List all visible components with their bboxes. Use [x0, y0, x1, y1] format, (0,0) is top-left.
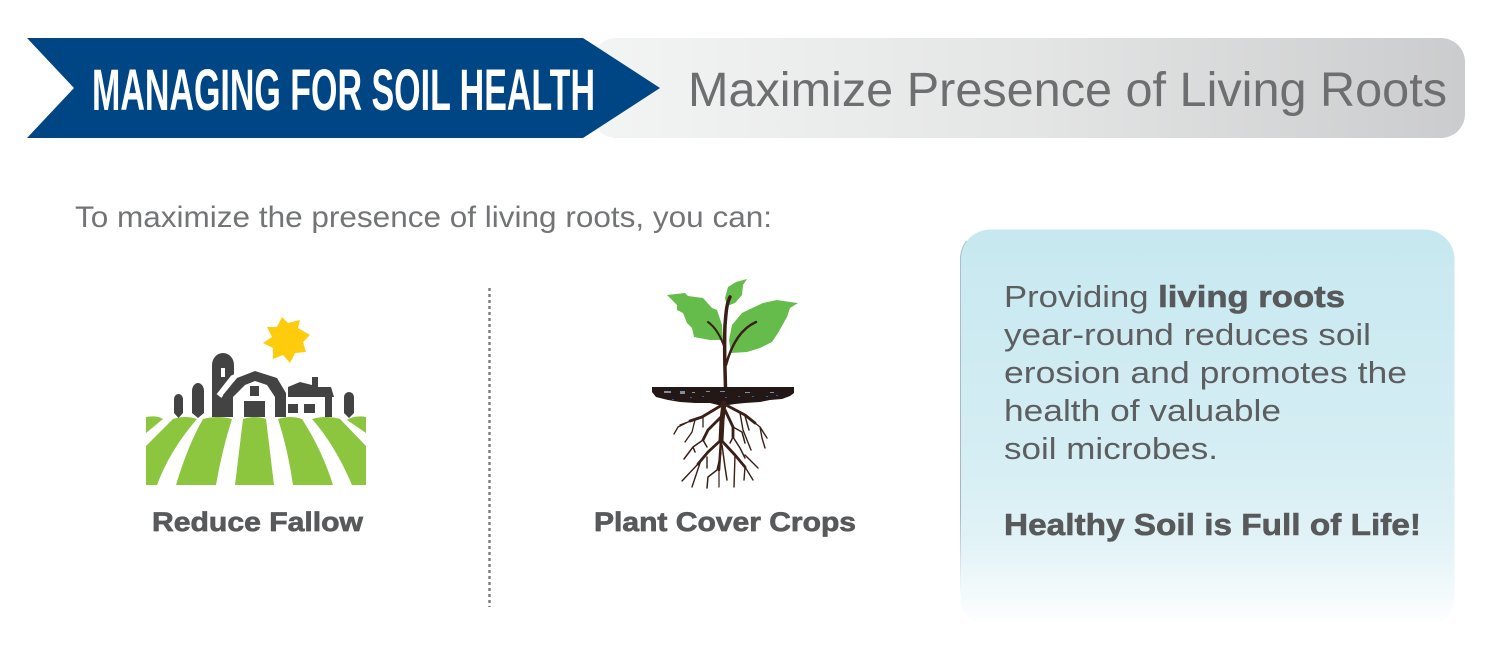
silo — [212, 353, 234, 417]
trees — [174, 383, 354, 418]
field stripes — [146, 416, 366, 485]
icon: sun — [263, 317, 310, 363]
label: Plant Cover Crops: Plant Cover Crops — [594, 507, 856, 537]
callout text — [1004, 279, 1421, 542]
icon: farm with sun — [146, 317, 366, 485]
icon: plant with roots — [652, 279, 798, 488]
subtitle pill — [592, 38, 1465, 138]
label: Reduce Fallow: Reduce Fallow — [152, 507, 364, 537]
callout text: year-round reduces soil — [1004, 317, 1371, 352]
subtitle: Maximize Presence of Living Roots: Maximize Presence of Living Roots — [688, 64, 1447, 117]
farmhouse — [288, 377, 334, 417]
callout text: erosion and promotes the — [1004, 355, 1407, 390]
title: Managing for Soil Health: MANAGING FOR SOIL HEALTH — [92, 58, 595, 123]
intro text: To maximize the presence of living roots, you can: — [75, 201, 772, 234]
leaves — [667, 279, 798, 353]
callout text: health of valuable — [1004, 393, 1281, 428]
roots — [674, 403, 767, 488]
callout text: soil microbes. — [1004, 431, 1218, 466]
stem and veins — [708, 297, 756, 388]
callout text: Providing living roots — [1004, 279, 1345, 314]
barn — [219, 368, 289, 396]
soil — [652, 387, 794, 406]
callout text: Healthy Soil is Full of Life! — [1004, 507, 1421, 542]
callout panel — [960, 230, 1454, 628]
title banner — [27, 38, 660, 138]
dotted divider — [488, 288, 491, 607]
